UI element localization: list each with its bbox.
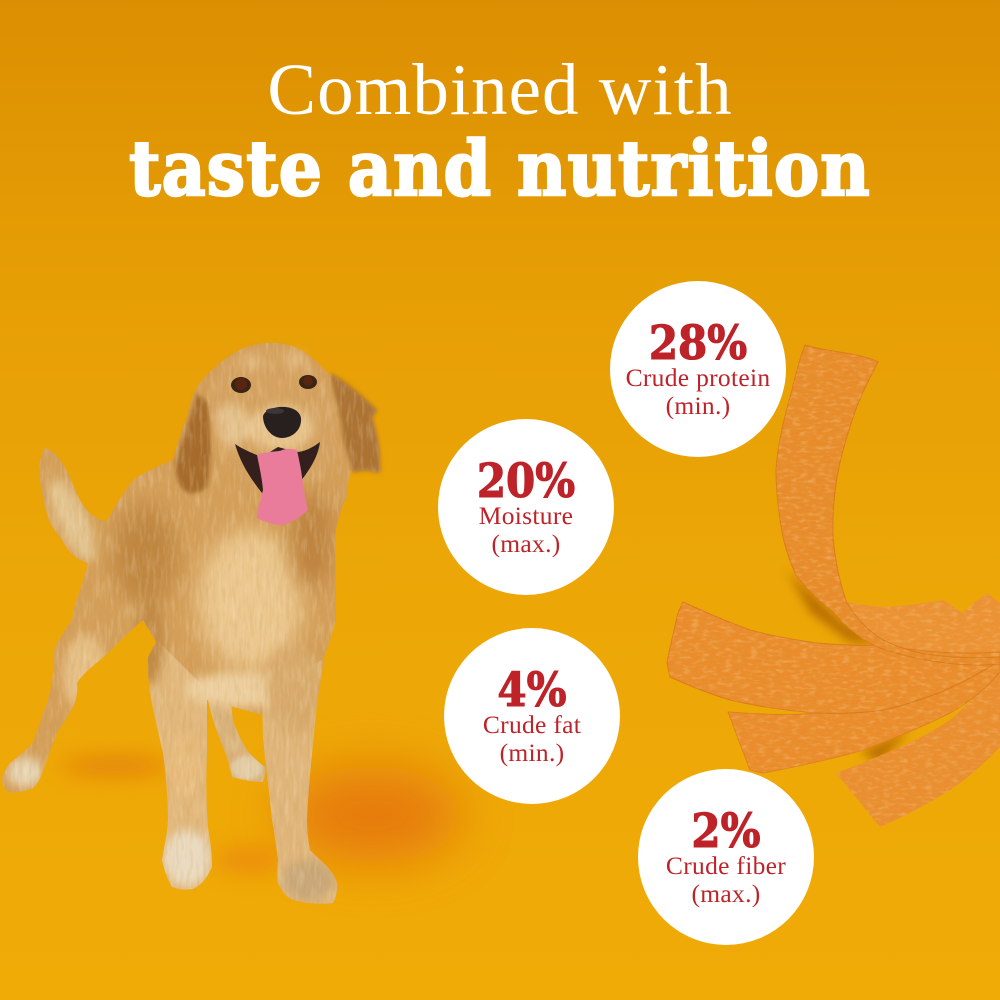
badge: crude fat: Crude fat (483, 710, 581, 739)
dog silhouette (2, 343, 380, 904)
mouth (235, 442, 320, 493)
treat: curled strip (776, 345, 1000, 665)
badge: moisture (438, 419, 614, 595)
icon: golden retriever dog (0, 340, 390, 910)
badge: crude protein: (min.) (666, 391, 730, 420)
badge: crude fiber (638, 769, 814, 945)
treat: front strip (667, 602, 1000, 713)
icon: treat strips (667, 345, 1000, 827)
treat: lower strip (728, 660, 1000, 773)
title line 1: Combined with (267, 49, 733, 130)
badge: crude protein (610, 281, 786, 457)
right ear (330, 373, 380, 473)
badge: crude protein: Crude protein (626, 363, 770, 392)
badge: moisture: Moisture (479, 501, 573, 530)
floor shadow (60, 757, 462, 874)
badge: crude fat: (min.) (500, 738, 564, 767)
fur texture (0, 340, 390, 910)
badge: crude protein: 28% (649, 315, 747, 370)
treat: far curled tail (847, 593, 1000, 658)
title line 2: taste and nutrition (129, 124, 871, 214)
treat: bottom strip (836, 670, 1000, 827)
left ear (175, 393, 211, 493)
right eye (299, 375, 317, 389)
badge: crude fiber: 2% (691, 803, 761, 858)
illustration: floor shadow, dog and treats (2, 342, 1000, 904)
badge: crude fiber: (max.) (691, 879, 761, 908)
left eye (231, 377, 251, 393)
badge: crude fiber: Crude fiber (666, 851, 786, 880)
face (209, 346, 336, 488)
badge: moisture: 20% (477, 453, 575, 508)
badge: crude fat (444, 628, 620, 804)
badge: crude fat: 4% (497, 662, 567, 717)
treat shadows (787, 570, 910, 762)
forehead and muzzle highlights (216, 352, 314, 450)
nose (263, 407, 301, 438)
tongue (257, 449, 308, 525)
badge: moisture: (max.) (491, 529, 561, 558)
dog shading (7, 473, 334, 900)
